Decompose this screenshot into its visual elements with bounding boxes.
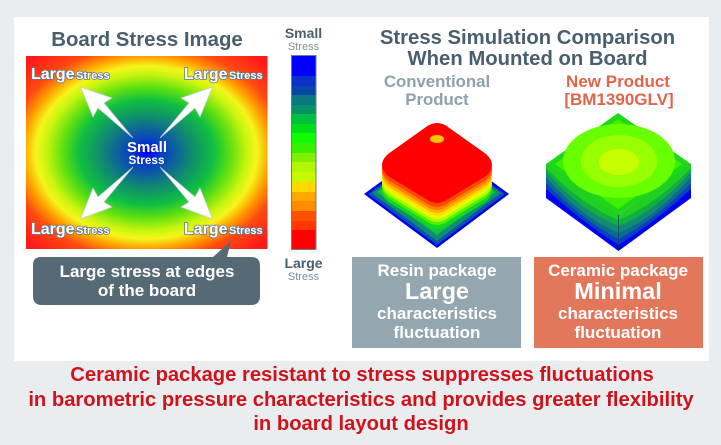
label: large stress bottom-right: Large: [184, 221, 228, 238]
box: ceramic package: fluctuation: [575, 323, 661, 342]
label: small stress: Small: [285, 25, 322, 41]
label: new product: [564, 72, 674, 109]
box: resin package: fluctuation: [394, 323, 480, 342]
conclusion text: [28, 364, 694, 435]
box: resin package: Resin package: [377, 261, 497, 280]
label: large stress bottom-left: Large: [31, 221, 75, 238]
top face: [546, 113, 691, 215]
white panel: [14, 17, 709, 361]
label: large stress bottom-left: Stress: [76, 225, 110, 237]
label: large stress: [284, 255, 323, 283]
box: ceramic package: characteristics: [558, 304, 678, 323]
arrow: top-left: [80, 87, 133, 138]
colour scale: [284, 25, 323, 283]
heading: Board Stress Image: Board Stress Image: [51, 29, 243, 51]
label: conventional product: Conventional: [384, 72, 490, 91]
label: large stress bottom-right: [184, 221, 263, 238]
arrow: top-right: [160, 87, 212, 138]
label: large stress: Large: [284, 255, 323, 271]
heading: simulation comparison: Stress Simulation Comparison: [380, 27, 675, 49]
callout: large stress at edges: Large stress at edges: [60, 262, 234, 281]
conclusion text: in board layout design: [253, 413, 469, 435]
label: new product: [BM1390GLV]: [564, 90, 674, 109]
label: large stress bottom-left: [31, 221, 110, 238]
box: ceramic package: Minimal: [574, 278, 662, 304]
label: large stress top-left: [31, 66, 110, 83]
label: large stress top-right: Stress: [229, 70, 263, 82]
box: resin package: characteristics: [377, 304, 497, 323]
label: large stress top-left: Stress: [76, 70, 110, 82]
vent hole: [430, 135, 444, 143]
label: conventional product: Product: [405, 90, 469, 109]
arrow: bottom-right: [160, 167, 212, 219]
box: ceramic package: Ceramic package: [548, 261, 688, 280]
conclusion text: in barometric pressure characteristics and provides greater flexibility: [28, 389, 694, 411]
right face: [618, 164, 691, 251]
chip: conventional resin package: [364, 123, 509, 248]
label: small stress centre: Stress: [128, 153, 165, 167]
left face: [546, 164, 618, 251]
arrow: bottom-left: [80, 167, 133, 219]
label: large stress bottom-right: Stress: [229, 225, 263, 237]
label: small stress: Stress: [288, 41, 320, 53]
label: small stress centre: Small: [127, 139, 167, 156]
label: large stress: Stress: [288, 271, 320, 283]
heading: simulation comparison: [380, 27, 675, 70]
label: large stress top-right: Large: [184, 66, 228, 83]
callout: large stress at edges: of the board: [98, 281, 196, 300]
heading: simulation comparison: When Mounted on Board: [408, 48, 647, 70]
label: new product: New Product: [566, 72, 670, 91]
conclusion text: Ceramic package resistant to stress suppresses fluctuations: [70, 364, 654, 386]
label: small stress: [285, 25, 322, 53]
box: ceramic package: [534, 257, 703, 348]
box: resin package: [352, 257, 521, 348]
box: resin package: Large: [405, 278, 469, 304]
label: small stress centre: [127, 139, 167, 167]
callout: large stress at edges: [33, 241, 260, 305]
heatmap: board stress: [26, 56, 268, 249]
label: large stress top-left: Large: [31, 66, 75, 83]
chip: new ceramic package: [546, 113, 691, 251]
label: large stress top-right: [184, 66, 263, 83]
label: conventional product: [384, 72, 490, 109]
